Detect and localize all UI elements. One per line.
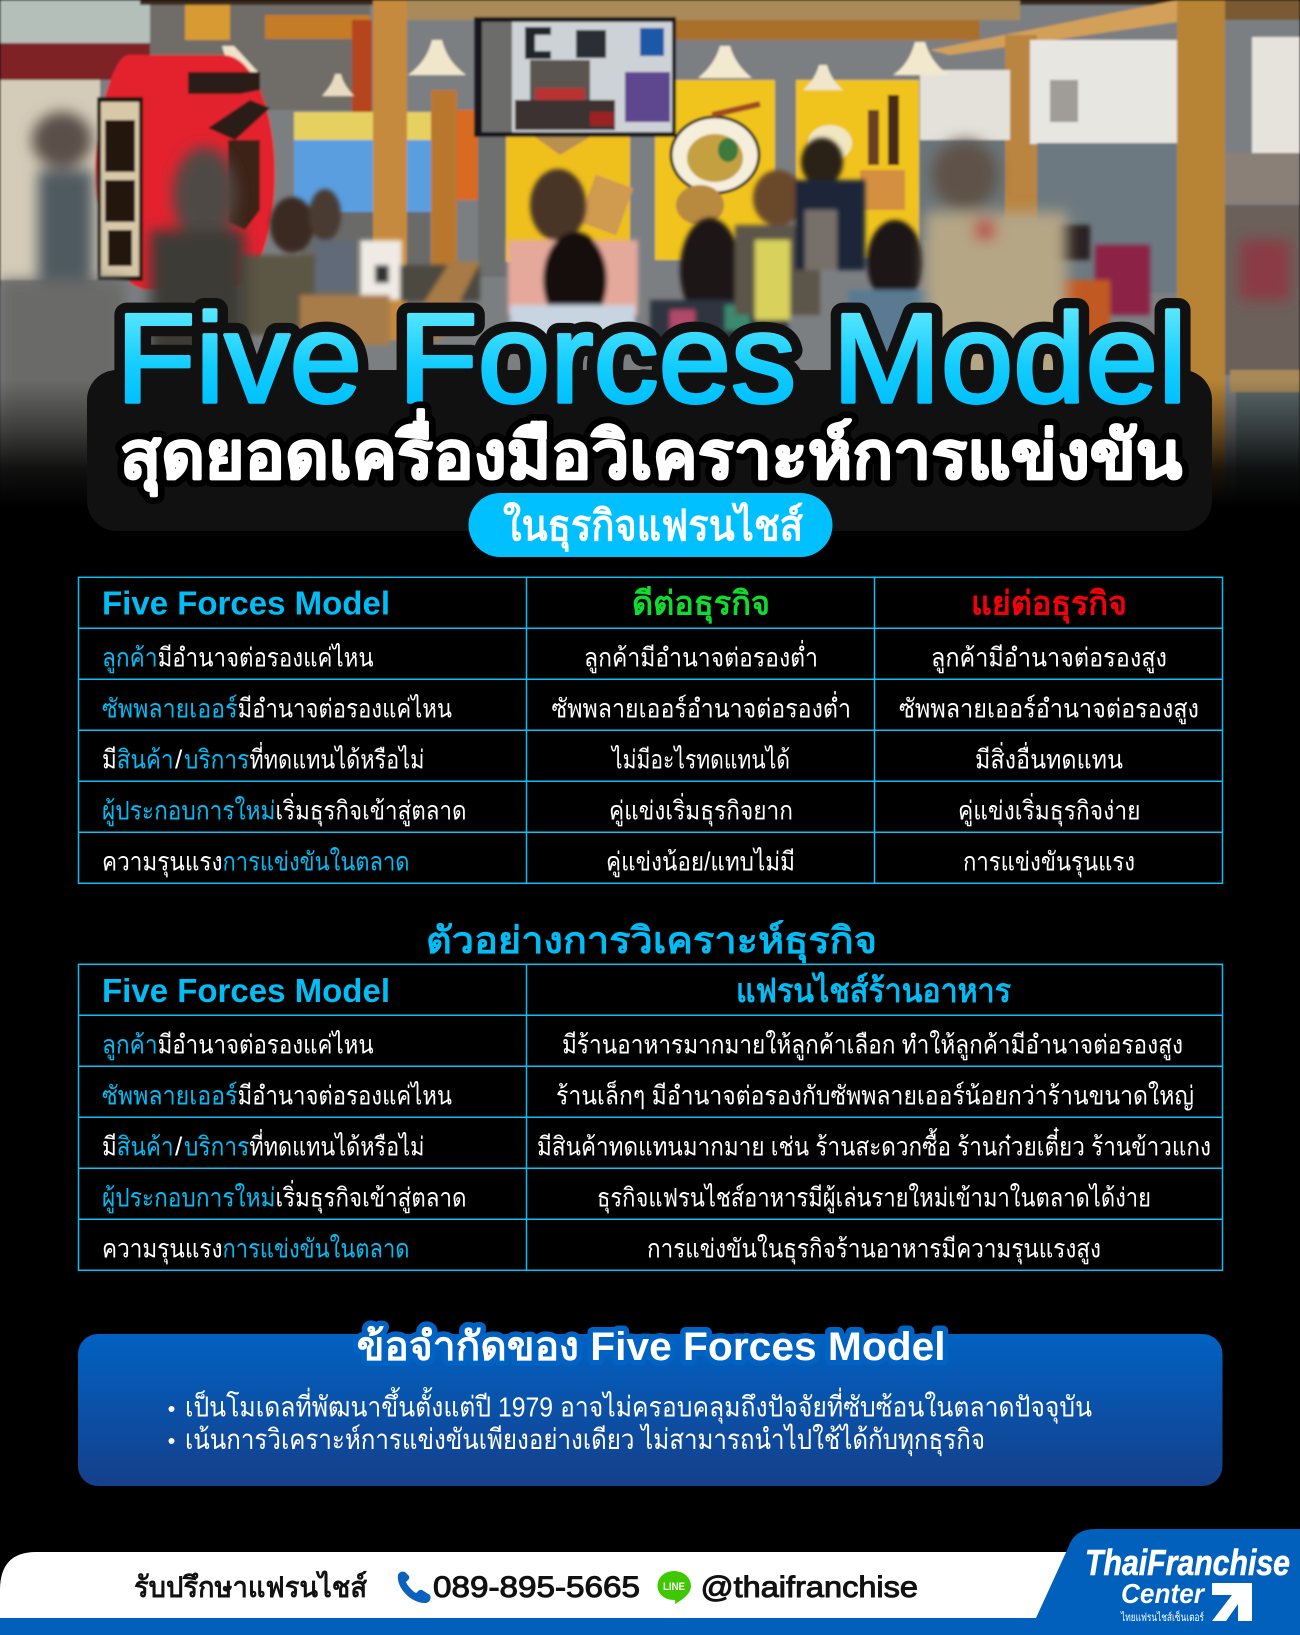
row: customers: ลูกค้ามีอำนาจต่อรองสูง (931, 643, 1167, 674)
title: Five Forces Model: Five Forces Model (116, 287, 1187, 429)
hero photo: ramen shop (0, 0, 1300, 530)
row: customers (102, 640, 1167, 674)
footer bar (0, 1552, 1300, 1635)
blurred passers-by (0, 112, 1290, 500)
example row: customers: ลูกค้า (102, 1029, 158, 1060)
table header row: แย่ต่อธุรกิจ (971, 584, 1127, 624)
logo: ThaiFranchise Center: ไทยแฟรนไชส์เซ็นเตอร์ (1120, 1610, 1204, 1624)
row: suppliers (102, 691, 1199, 725)
example row: new entrants: ธุรกิจแฟรนไชส์อาหารมีผู้เล่นรายใหม่เข้ามาในตลาดได้ง่าย (597, 1182, 1151, 1213)
phone number: 089-895-5665 (433, 1571, 640, 1604)
example row: substitutes: / (175, 1131, 183, 1161)
row: substitutes: / (175, 745, 183, 775)
limitations heading: ข้อจำกัดของ Five Forces Model (357, 1325, 946, 1369)
row: rivalry: ความรุนแรง (102, 847, 222, 878)
example row: substitutes: บริการ (184, 1131, 249, 1161)
example row: suppliers: ซัพพลายเออร์ (102, 1080, 238, 1110)
row: rivalry: การแข่งขันรุนแรง (963, 847, 1135, 878)
row: new entrants: ผู้ประกอบการใหม่ (102, 796, 276, 827)
example row: substitutes (102, 1127, 1211, 1161)
logo: ThaiFranchise Center: Center (1121, 1578, 1206, 1609)
example row: rivalry: การแข่งขันในธุรกิจร้านอาหารมีความรุนแรงสูง (647, 1233, 1101, 1264)
example row: rivalry (102, 1233, 1101, 1264)
row: substitutes (102, 742, 1123, 775)
row: suppliers: ซัพพลายเออร์อำนาจต่อรองสูง (899, 694, 1199, 725)
icon: phone (398, 1572, 431, 1603)
example row: suppliers: ร้านเล็กๆ มีอำนาจต่อรองกับซัพพลายเออร์น้อยกว่าร้านขนาดใหญ่ (556, 1079, 1194, 1110)
example row: rivalry: ความรุนแรง (102, 1233, 222, 1264)
icon: LINE (658, 1571, 691, 1604)
row: customers: ลูกค้ามีอำนาจต่อรองต่ำ (584, 640, 818, 674)
example row: substitutes: สินค้า (117, 1131, 174, 1161)
row: customers: มีอำนาจต่อรองแค่ไหน (158, 643, 374, 673)
title backing panel (87, 370, 1212, 531)
row: new entrants: คู่แข่งเริ่มธุรกิจง่าย (958, 793, 1140, 827)
seated customers (240, 138, 1150, 360)
icon: logo arrow (1212, 1583, 1252, 1621)
example row: new entrants: ผู้ประกอบการใหม่ (102, 1182, 276, 1213)
example row: substitutes: ที่ทดแทนได้หรือไม่ (249, 1128, 424, 1161)
row: new entrants (102, 793, 1140, 827)
red lantern (95, 55, 275, 290)
example row: new entrants: เริ่มธุรกิจเข้าสู่ตลาด (276, 1179, 466, 1213)
table: restaurant franchise example (78, 964, 1222, 1270)
subtitle: สุดยอดเครื่องมือวิเคราะห์การแข่งขัน (120, 408, 1182, 497)
logo: ThaiFranchise Center (1036, 1529, 1300, 1635)
pill: in franchise business: ในธุรกิจแฟรนไชส์ (503, 501, 803, 552)
example table header row: แฟรนไชส์ร้านอาหาร (736, 971, 1011, 1009)
example row: customers: มีอำนาจต่อรองแค่ไหน (158, 1029, 374, 1059)
row: suppliers: ซัพพลายเออร์ (102, 694, 238, 724)
row: substitutes: มีสิ่งอื่นทดแทน (975, 742, 1123, 775)
example row: suppliers: มีอำนาจต่อรองแค่ไหน (238, 1080, 452, 1110)
row: suppliers: มีอำนาจต่อรองแค่ไหน (238, 694, 452, 724)
row: substitutes: ไม่มีอะไรทดแทนได้ (610, 745, 790, 775)
heading: business analysis example: ตัวอย่างการวิเคราะห์ธุรกิจ (426, 920, 877, 964)
example row: substitutes: มีสินค้าทดแทนมากมาย เช่น ร้านสะดวกซื้อ ร้านก๋วยเตี๋ยว ร้านข้าวแกง (537, 1127, 1211, 1161)
example table header row: Five Forces Model (102, 972, 390, 1009)
row: new entrants: เริ่มธุรกิจเข้าสู่ตลาด (276, 793, 466, 827)
table header row: ดีต่อธุรกิจ (632, 584, 770, 624)
row: substitutes: บริการ (184, 745, 249, 775)
row: rivalry: การแข่งขันในตลาด (222, 847, 410, 877)
limitation bullet 1: เป็นโมเดลที่พัฒนาขึ้นตั้งแต่ปี 1979 อาจไม่ครอบคลุมถึงปัจจัยที่ซับซ้อนในตลาดปัจจุบัน (185, 1387, 1092, 1425)
table: good vs bad (78, 577, 1222, 883)
row: new entrants: คู่แข่งเริ่มธุรกิจยาก (609, 793, 793, 827)
panel: limitations (78, 1325, 1222, 1486)
example row: customers (102, 1029, 1183, 1060)
example row: suppliers (102, 1079, 1194, 1110)
title: Five Forces Model: Five Forces Model (116, 287, 1187, 429)
table header row: Five Forces Model (102, 584, 390, 621)
lamps (408, 40, 466, 75)
icon: LINE: LINE (663, 1581, 685, 1593)
row: substitutes: มี (102, 745, 117, 775)
example table header row (102, 971, 1011, 1009)
pill: in franchise business (468, 493, 832, 557)
photo fade to black (0, 380, 1300, 540)
table header row (102, 584, 1127, 624)
example row: substitutes: มี (102, 1131, 117, 1161)
row: rivalry (102, 847, 1135, 878)
example row: rivalry: การแข่งขันในตลาด (222, 1233, 410, 1263)
subtitle: สุดยอดเครื่องมือวิเคราะห์การแข่งขัน (120, 408, 1182, 497)
row: rivalry: คู่แข่งน้อย/แทบไม่มี (606, 847, 795, 878)
row: suppliers: ซัพพลายเออร์อำนาจต่อรองต่ำ (552, 691, 851, 724)
example row: customers: มีร้านอาหารมากมายให้ลูกค้าเลือก ทำให้ลูกค้ามีอำนาจต่อรองสูง (562, 1029, 1183, 1060)
limitation bullet 2: เน้นการวิเคราะห์การแข่งขันเพียงอย่างเดียว ไม่สามารถนำไปใช้ได้กับทุกธุรกิจ (185, 1423, 985, 1457)
example row: new entrants (102, 1179, 1151, 1213)
consult label: รับปรึกษาแฟรนไชส์ (134, 1570, 367, 1604)
LINE handle: @thaifranchise (701, 1571, 918, 1604)
TV screen frame (474, 17, 676, 137)
row: substitutes: สินค้า (117, 745, 174, 775)
row: customers: ลูกค้า (102, 643, 158, 674)
row: substitutes: ที่ทดแทนได้หรือไม่ (249, 742, 424, 775)
